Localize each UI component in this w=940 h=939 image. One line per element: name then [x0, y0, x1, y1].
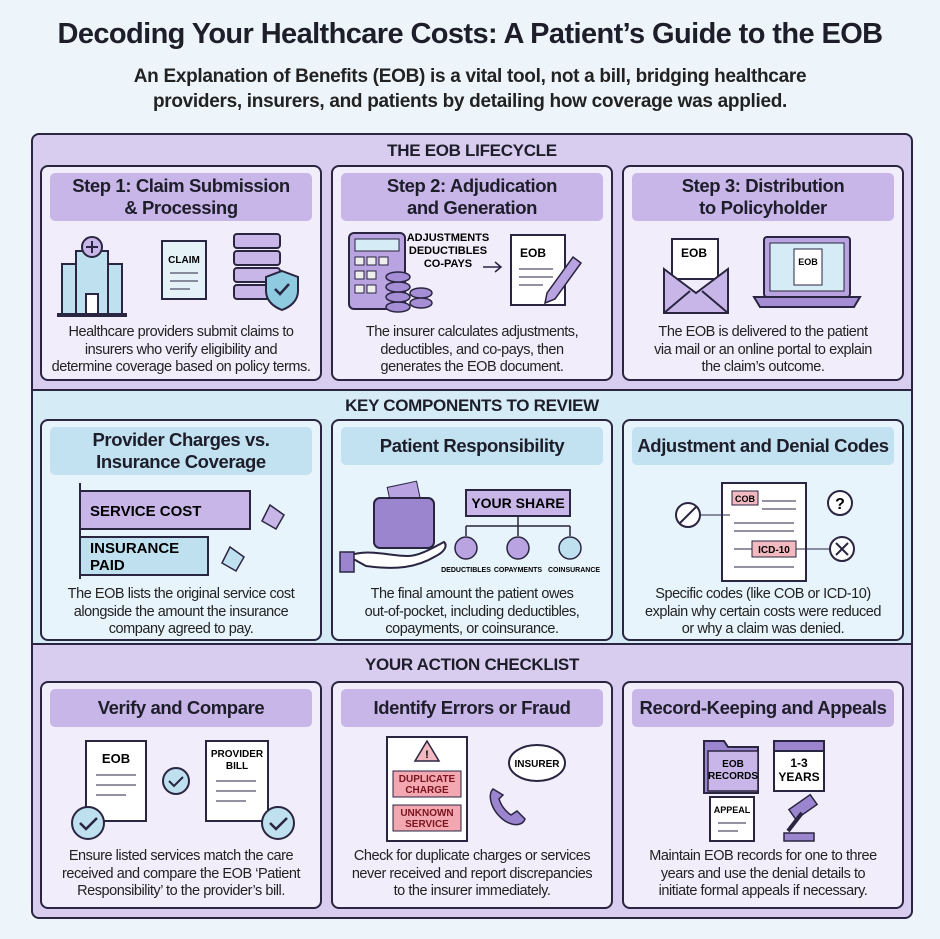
icon: wallet and share tree: DEDUCTIBLES: [441, 567, 491, 574]
icons: envelope, laptop: EOB: [798, 257, 818, 267]
description: to the insurer immediately.: [394, 883, 550, 899]
icon: two documents with checks: [71, 740, 295, 840]
description: copayments, or coinsurance.: [385, 621, 559, 637]
description: [62, 848, 300, 899]
icon: wallet and share tree: COPAYMENTS: [494, 567, 542, 574]
description: [645, 586, 881, 637]
description: or why a claim was denied.: [682, 621, 844, 637]
heading: [632, 173, 894, 221]
panel: action checklist: [31, 643, 913, 919]
section heading: THE EOB LIFECYCLE: [387, 141, 557, 160]
card: step 2: [331, 165, 613, 381]
section heading: KEY COMPONENTS TO REVIEW: [345, 396, 599, 415]
icon: document with warnings and phone: [386, 736, 566, 842]
icon: document with codes: COB: [735, 494, 756, 504]
heading: [341, 173, 603, 221]
chart: cost bars: SERVICE COST: [90, 503, 201, 520]
heading: [341, 689, 603, 727]
icon: wallet and share tree: YOUR SHARE: [471, 495, 565, 511]
icon: document with codes: ICD-10: [758, 545, 790, 556]
icon: two documents with checks: BILL: [226, 761, 248, 772]
card: verify: [40, 681, 322, 909]
panel: key components: [31, 389, 913, 645]
heading: [632, 427, 894, 465]
description: Responsibility’ to the provider’s bill.: [77, 883, 285, 899]
subtitle: [134, 66, 806, 112]
heading: Adjustment and Denial Codes: [637, 435, 889, 456]
card: provider charges: [40, 419, 322, 641]
icon: document with codes: [675, 482, 855, 582]
description: [52, 324, 310, 375]
card: step 3: [622, 165, 904, 381]
heading: Identify Errors or Fraud: [373, 697, 571, 718]
subtitle: providers, insurers, and patients by detailing how coverage was applied.: [153, 91, 787, 112]
description: The EOB is delivered to the patient: [658, 324, 868, 340]
description: The final amount the patient owes: [371, 586, 573, 602]
heading: [50, 173, 312, 221]
card: errors: [331, 681, 613, 909]
heading: Verify and Compare: [98, 697, 264, 718]
icon: document with warnings and phone: CHARGE: [405, 785, 449, 796]
description: insurers who verify eligibility and: [85, 342, 277, 358]
heading: & Processing: [124, 197, 238, 218]
icon: document with warnings and phone: SERVICE: [405, 819, 449, 830]
heading: [632, 689, 894, 727]
description: company agreed to pay.: [109, 621, 253, 637]
heading: Patient Responsibility: [380, 435, 564, 456]
icon: document with warnings and phone: INSURER: [514, 759, 560, 770]
card: step 1: [40, 165, 322, 381]
subtitle: An Explanation of Benefits (EOB) is a vital tool, not a bill, bridging healthcare: [134, 66, 806, 87]
icons: folder, calendar, appeal, gavel: RECORDS: [708, 771, 758, 782]
description: the claim’s outcome.: [702, 359, 824, 375]
description: never received and report discrepancies: [352, 866, 592, 882]
description: years and use the denial details to: [661, 866, 865, 882]
description: [352, 848, 592, 899]
description: Ensure listed services match the care: [69, 848, 293, 864]
description: [68, 586, 295, 637]
chart: cost bars: [79, 483, 285, 579]
icons: calculator, coins, EOB: EOB: [520, 246, 546, 260]
chart: cost bars: INSURANCE: [90, 540, 179, 557]
description: [366, 324, 578, 375]
heading: Step 1: Claim Submission: [72, 175, 290, 196]
description: out-of-pocket, including deductibles,: [365, 604, 579, 620]
icon: two documents with checks: PROVIDER: [211, 749, 264, 760]
description: deductibles, and co-pays, then: [380, 342, 564, 358]
card: patient responsibility: [331, 419, 613, 641]
description: The insurer calculates adjustments,: [366, 324, 578, 340]
description: [365, 586, 579, 637]
description: Check for duplicate charges or services: [354, 848, 590, 864]
icons: folder, calendar, appeal, gavel: EOB: [722, 759, 744, 770]
icons: folder, calendar, appeal, gavel: APPEAL: [714, 805, 751, 815]
description: The EOB lists the original service cost: [68, 586, 294, 602]
icons: calculator, coins, EOB: ADJUSTMENTS: [407, 232, 489, 244]
description: Maintain EOB records for one to three: [649, 848, 877, 864]
description: received and compare the EOB ‘Patient: [62, 866, 300, 882]
icons: hospital, claim, server: CLAIM: [168, 255, 200, 266]
icon: document with warnings and phone: DUPLICATE: [399, 774, 456, 785]
heading: Insurance Coverage: [96, 451, 266, 472]
description: initiate formal appeals if necessary.: [659, 883, 867, 899]
icon: wallet and share tree: COINSURANCE: [548, 567, 600, 574]
title: Decoding Your Healthcare Costs: A Patient’s Guide to the EOB: [57, 18, 882, 50]
card: codes: [622, 419, 904, 641]
heading: Step 2: Adjudication: [387, 175, 557, 196]
heading: and Generation: [407, 197, 537, 218]
description: explain why certain costs were reduced: [645, 604, 881, 620]
description: generates the EOB document.: [381, 359, 563, 375]
description: determine coverage based on policy terms.: [52, 359, 310, 375]
heading: Record-Keeping and Appeals: [640, 697, 886, 718]
description: [654, 324, 872, 375]
description: Healthcare providers submit claims to: [68, 324, 294, 340]
section heading: YOUR ACTION CHECKLIST: [365, 655, 579, 674]
icons: hospital, claim, server: [57, 233, 299, 317]
icon: two documents with checks: EOB: [102, 751, 130, 766]
description: Specific codes (like COB or ICD-10): [655, 586, 871, 602]
chart: cost bars: PAID: [90, 557, 125, 574]
icon: document with warnings and phone: !: [425, 749, 429, 761]
icon: document with codes: ?: [835, 496, 845, 513]
heading: Step 3: Distribution: [682, 175, 844, 196]
icon: document with warnings and phone: UNKNOWN: [400, 808, 454, 819]
icons: calculator, coins, EOB: [348, 232, 582, 313]
icons: folder, calendar, appeal, gavel: [703, 740, 825, 842]
icons: calculator, coins, EOB: CO-PAYS: [424, 258, 472, 270]
icons: calculator, coins, EOB: DEDUCTIBLES: [409, 245, 487, 257]
description: alongside the amount the insurance: [74, 604, 288, 620]
icons: envelope, laptop: [663, 236, 862, 314]
heading: to Policyholder: [699, 197, 827, 218]
heading: [341, 427, 603, 465]
heading: [50, 427, 312, 475]
heading: [50, 689, 312, 727]
description: via mail or an online portal to explain: [654, 342, 872, 358]
description: [649, 848, 877, 899]
icon: wallet and share tree: [339, 480, 600, 574]
card: record-keeping: [622, 681, 904, 909]
icons: folder, calendar, appeal, gavel: 1-3: [790, 756, 808, 770]
icons: envelope, laptop: EOB: [681, 246, 707, 260]
icons: folder, calendar, appeal, gavel: YEARS: [778, 770, 820, 784]
panel: EOB lifecycle: [31, 133, 913, 391]
heading: Provider Charges vs.: [92, 429, 270, 450]
